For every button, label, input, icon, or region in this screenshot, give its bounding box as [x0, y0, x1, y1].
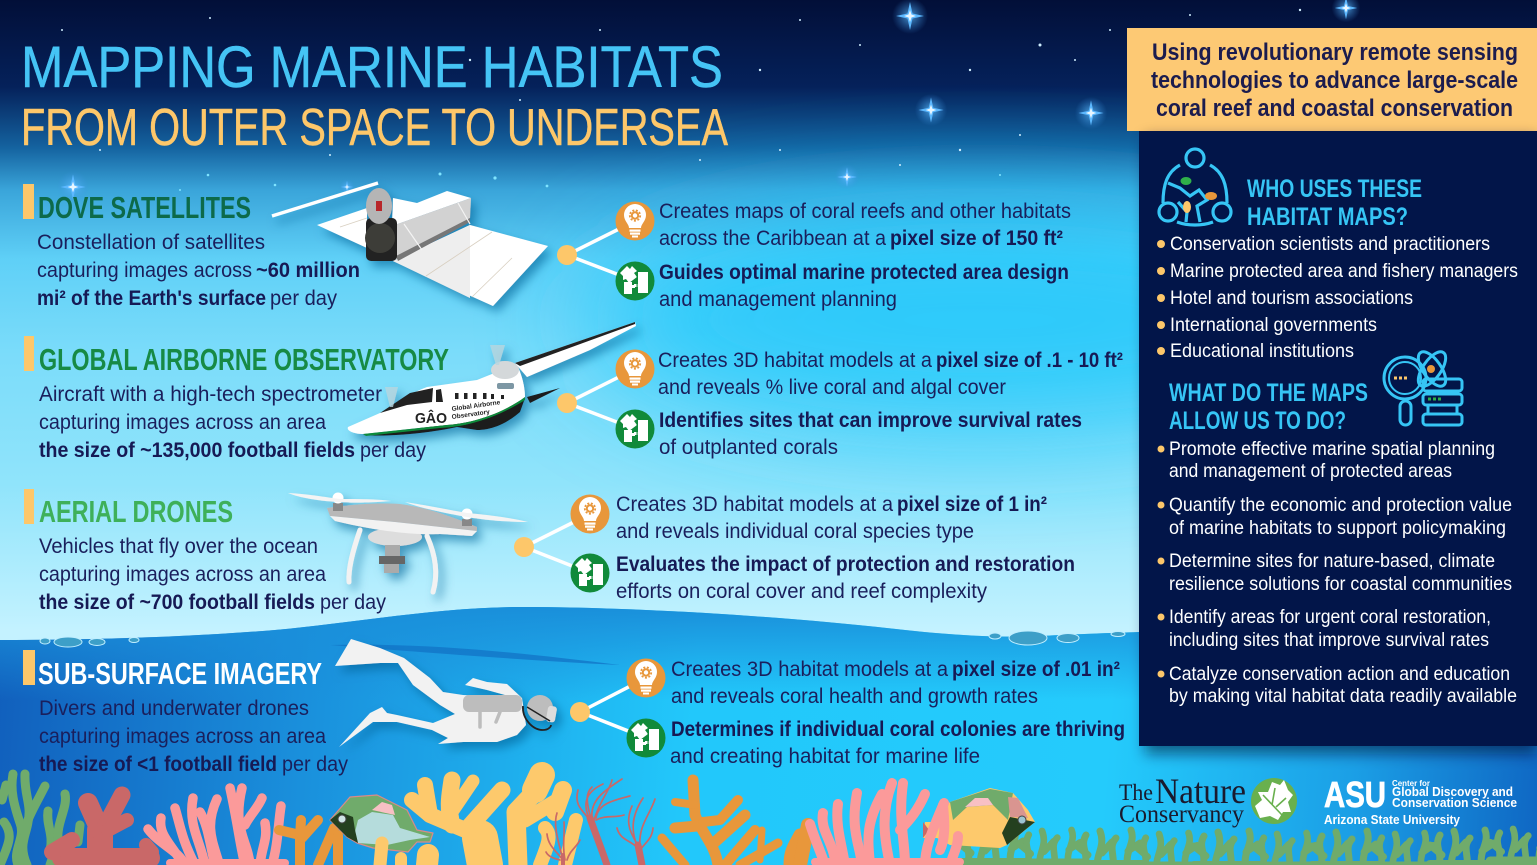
- airplane illustration: Global Airborne: [451, 399, 501, 413]
- water surface bubbles: [40, 631, 1125, 647]
- title: [21, 35, 728, 157]
- section: Aerial drones: per day: [320, 591, 386, 614]
- panel: who uses / what do maps do: [1139, 131, 1537, 754]
- outcomes: Sub-surface: Creates 3D habitat models at a: [671, 658, 948, 681]
- coral reef illustration: [0, 774, 1537, 865]
- section: Global Airborne Observatory: [24, 336, 449, 462]
- connector and icons: Sub-surface: [570, 658, 666, 758]
- green kelp: [0, 774, 80, 865]
- outcomes: Dove: [659, 200, 1071, 311]
- list: map uses: [1158, 439, 1517, 707]
- outcomes: Drones: Evaluates the impact of protection and restoration: [616, 553, 1075, 576]
- outcomes: Dove: Guides optimal marine protected area design: [659, 261, 1069, 284]
- outcomes: Sub-surface: and reveals coral health and growth rates: [671, 685, 1038, 708]
- section: Sub-surface imagery: SUB-SURFACE IMAGERY: [38, 656, 322, 691]
- heading: what do the maps allow: ALLOW US TO DO?: [1169, 407, 1346, 435]
- list: map uses: Catalyze conservation action and education: [1169, 664, 1510, 685]
- section: Global Airborne Observatory: capturing images across an area: [39, 411, 326, 434]
- section: Dove satellites: capturing images across: [37, 259, 252, 282]
- airplane illustration: [348, 322, 636, 436]
- section: Sub-surface imagery: the size of <1 football field: [39, 753, 277, 776]
- logo: Arizona State University: ASU: [1324, 774, 1386, 815]
- outcomes: Airborne: [658, 349, 1123, 459]
- panel: subtitle callout: [1127, 28, 1537, 131]
- satellite illustration: [272, 183, 548, 306]
- diver illustration: [335, 639, 557, 747]
- outcomes: Sub-surface: [670, 658, 1125, 768]
- outcomes: Airborne: pixel size of .1 - 10 ft²: [936, 349, 1123, 372]
- star glints: [57, 0, 1360, 203]
- drone illustration: [288, 492, 528, 592]
- section: Global Airborne Observatory: the size of ~135,000 football fields: [39, 439, 355, 462]
- outcomes: Sub-surface: and creating habitat for marine life: [670, 745, 980, 768]
- airplane illustration: GÂO: [415, 409, 447, 427]
- outcomes: Drones: pixel size of 1 in²: [897, 493, 1047, 516]
- list: map uses: of marine habitats to support policymaking: [1169, 518, 1506, 539]
- orange coral left: [279, 820, 338, 865]
- outcomes: Drones: Creates 3D habitat models at a: [616, 493, 893, 516]
- orange coral right: [662, 780, 808, 865]
- section: Global Airborne Observatory: Aircraft with a high-tech spectrometer: [39, 383, 382, 406]
- logo: The Nature Conservancy: Conservancy: [1119, 801, 1244, 828]
- section: Dove satellites: per day: [270, 287, 337, 310]
- pink coral right: [810, 783, 960, 865]
- list: map uses: Determine sites for nature-based, climate: [1169, 551, 1495, 572]
- section: Dove satellites: mi² of the Earth's surface: [37, 287, 266, 310]
- section: Sub-surface imagery: capturing images across an area: [39, 725, 326, 748]
- list: map users: Conservation scientists and practitioners: [1170, 234, 1490, 255]
- heading: what do the maps allow: [1169, 379, 1368, 435]
- list: map uses: by making vital habitat data readily available: [1169, 686, 1517, 707]
- heading: what do the maps allow: WHAT DO THE MAPS: [1169, 379, 1368, 407]
- heading: who uses: WHO USES THESE: [1247, 175, 1422, 203]
- outcomes: Sub-surface: pixel size of .01 in²: [952, 658, 1120, 681]
- logo: Arizona State University: Arizona State University: [1324, 812, 1461, 827]
- salmon anemones: [563, 818, 642, 865]
- outcomes: Sub-surface: Determines if individual coral colonies are thriving: [671, 718, 1125, 741]
- section: Sub-surface imagery: Divers and underwater drones: [39, 697, 309, 720]
- outcomes: Drones: and reveals individual coral species type: [616, 520, 974, 543]
- section: Sub-surface imagery: [23, 650, 348, 776]
- logo: The Nature Conservancy: Nature: [1155, 771, 1246, 811]
- title: FROM OUTER SPACE TO UNDERSEA: [21, 99, 728, 157]
- list: map uses: including sites that improve survival rates: [1169, 630, 1489, 651]
- list: map uses: and management of protected areas: [1169, 461, 1452, 482]
- section: Global Airborne Observatory: GLOBAL AIRBORNE OBSERVATORY: [39, 342, 449, 377]
- section: Aerial drones: the size of ~700 football fields: [39, 591, 315, 614]
- outcomes: Dove: pixel size of 150 ft²: [890, 227, 1063, 250]
- list: map uses: Identify areas for urgent coral restoration,: [1169, 607, 1491, 628]
- green seaweed: [959, 828, 1537, 865]
- logo: Arizona State University: [1324, 774, 1517, 827]
- section: Dove satellites: [23, 184, 360, 310]
- list: map users: Marine protected area and fishery managers: [1170, 261, 1518, 282]
- outcomes: Airborne: Creates 3D habitat models at a: [658, 349, 932, 372]
- outcomes: Drones: efforts on coral cover and reef complexity: [616, 580, 987, 603]
- pink coral: [148, 788, 285, 865]
- list: map users: International governments: [1170, 315, 1377, 336]
- salmon coral: [52, 795, 152, 865]
- icon: people around globe: [1159, 149, 1231, 225]
- heading: who uses: HABITAT MAPS?: [1247, 203, 1408, 231]
- outcomes: Dove: and management planning: [659, 288, 897, 311]
- logo: Arizona State University: Global Discovery and: [1392, 784, 1513, 799]
- connector and icons: Dove: [557, 202, 654, 300]
- icon: magnifier, atom and data stack: [1384, 347, 1462, 425]
- section: Aerial drones: Vehicles that fly over the ocean: [39, 535, 318, 558]
- yellow coral: [380, 775, 576, 865]
- section: Global Airborne Observatory: per day: [360, 439, 426, 462]
- outcomes: Dove: across the Caribbean at a: [659, 227, 886, 250]
- airplane illustration: Observatory: [451, 409, 491, 421]
- list: map uses: Promote effective marine spatial planning: [1169, 439, 1495, 460]
- section: Sub-surface imagery: per day: [282, 753, 348, 776]
- section: Aerial drones: capturing images across an area: [39, 563, 326, 586]
- list: map users: Hotel and tourism associations: [1170, 288, 1413, 309]
- outcomes: Drones: [616, 493, 1075, 603]
- outcomes: Airborne: and reveals % live coral and algal cover: [658, 376, 1006, 399]
- fish left: [330, 795, 433, 852]
- section: Dove satellites: DOVE SATELLITES: [38, 190, 251, 225]
- logo: The Nature Conservancy: The: [1119, 780, 1153, 805]
- outcomes: Dove: Creates maps of coral reefs and other habitats: [659, 200, 1071, 223]
- logo: The Nature Conservancy: [1119, 771, 1297, 828]
- list: map uses: resilience solutions for coastal communities: [1169, 574, 1512, 595]
- section: Dove satellites: Constellation of satellites: [37, 231, 265, 254]
- heading: who uses: [1247, 175, 1422, 231]
- connector and icons: Airborne: [557, 350, 654, 448]
- logo: Arizona State University: Conservation Science: [1392, 795, 1517, 810]
- list: map users: [1157, 234, 1518, 362]
- outcomes: Airborne: Identifies sites that can improve survival rates: [659, 409, 1082, 432]
- title: MAPPING MARINE HABITATS: [21, 35, 723, 100]
- fish right: [923, 788, 1035, 848]
- logo: Arizona State University: Center for: [1392, 779, 1430, 788]
- section: Aerial drones: [24, 489, 386, 614]
- section: Aerial drones: AERIAL DRONES: [39, 494, 233, 529]
- ocean water body: [0, 607, 1537, 865]
- list: map users: Educational institutions: [1170, 341, 1354, 362]
- list: map uses: Quantify the economic and protection value: [1169, 495, 1512, 516]
- outcomes: Airborne: of outplanted corals: [659, 436, 838, 459]
- connector and icons: Drones: [514, 494, 610, 592]
- section: Dove satellites: ~60 million: [256, 259, 360, 282]
